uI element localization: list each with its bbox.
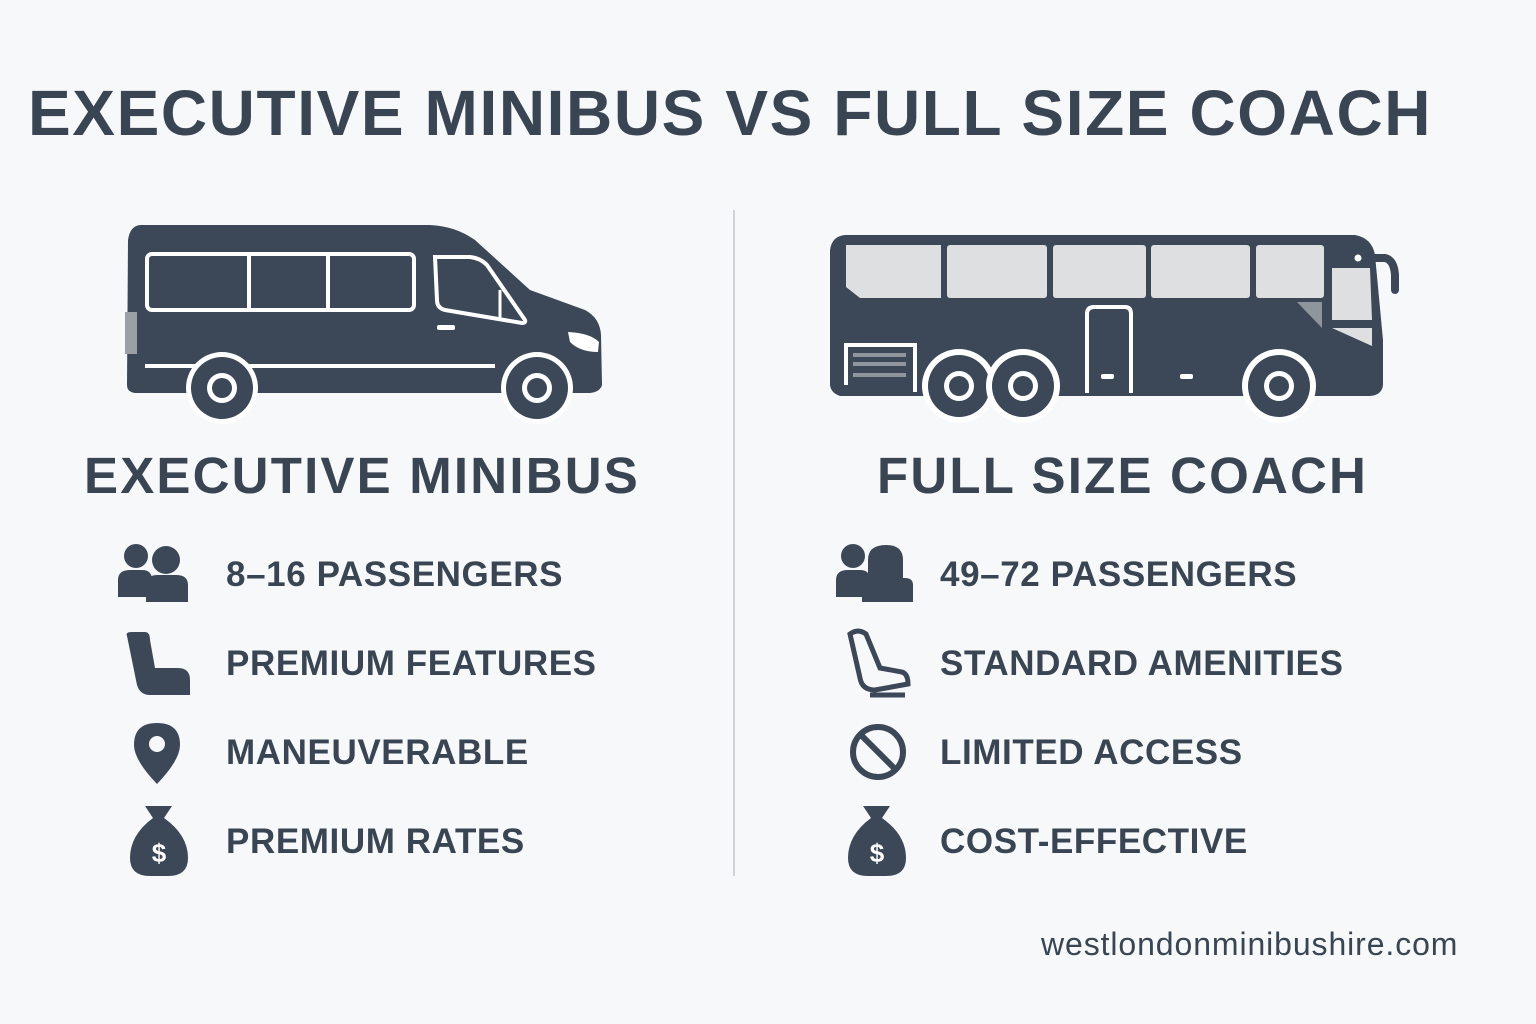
heading: full size coach: FULL SIZE COACH <box>877 447 1368 504</box>
heading: executive minibus: EXECUTIVE MINIBUS <box>84 447 640 504</box>
footer url: westlondonminibushire.com <box>1041 926 1458 962</box>
icon: minibus <box>125 225 602 424</box>
icon: prohibited <box>853 727 903 777</box>
icon: seat left <box>127 632 190 695</box>
list: minibus features <box>226 555 597 861</box>
list: coach features: STANDARD AMENITIES <box>940 644 1344 683</box>
list: minibus features: PREMIUM RATES <box>226 822 525 861</box>
icon: money bag left: $ <box>152 838 167 868</box>
icon: people left <box>118 544 188 602</box>
list: coach features: COST-EFFECTIVE <box>940 822 1248 861</box>
icon: seat right <box>850 631 908 695</box>
icon: people right <box>836 544 913 602</box>
title: EXECUTIVE MINIBUS VS FULL SIZE COACH <box>28 77 1432 149</box>
icon: location pin <box>134 723 180 784</box>
list: minibus features: 8–16 PASSENGERS <box>226 555 563 594</box>
icon: money bag right <box>848 806 906 876</box>
list: minibus features: MANEUVERABLE <box>226 733 529 772</box>
list: coach features: LIMITED ACCESS <box>940 733 1243 772</box>
icon: coach <box>830 235 1395 423</box>
icon: money bag left <box>130 806 188 876</box>
list: coach features: 49–72 PASSENGERS <box>940 555 1297 594</box>
icon: money bag right: $ <box>870 838 885 868</box>
list: coach features <box>940 555 1344 861</box>
list: minibus features: PREMIUM FEATURES <box>226 644 597 683</box>
